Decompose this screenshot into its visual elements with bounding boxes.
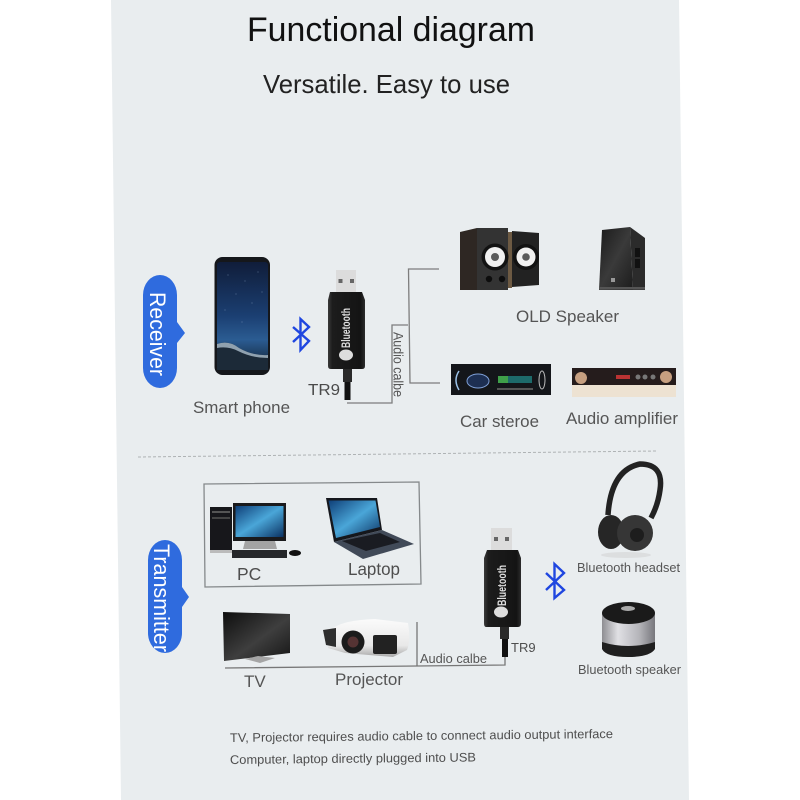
icon: PA speaker bbox=[599, 227, 645, 290]
label: audio cable vertical: Audio calbe bbox=[390, 332, 406, 397]
icon: bookshelf speakers bbox=[460, 228, 539, 290]
label: audio amplifier: Audio amplifier bbox=[566, 409, 678, 428]
connector: receiver audio cable bbox=[347, 269, 440, 403]
device: TR9 receiver dongle bbox=[328, 270, 365, 400]
badge: Receiver bbox=[143, 275, 185, 388]
connector: transmitter audio cable bbox=[225, 622, 505, 668]
note: line one: TV, Projector requires audio cable to connect audio output interface bbox=[230, 727, 613, 745]
device: TR9 transmitter dongle bbox=[484, 528, 521, 657]
title: Functional diagram bbox=[247, 11, 535, 49]
icon: car stereo bbox=[451, 364, 551, 395]
icon: bluetooth symbol receiver bbox=[293, 319, 309, 350]
icon: audio amplifier bbox=[572, 368, 676, 397]
icon: TV bbox=[223, 612, 290, 663]
label: bluetooth headset: Bluetooth headset bbox=[577, 561, 681, 575]
badge: Transmitter bbox=[148, 540, 189, 653]
label: audio cable horizontal: Audio calbe bbox=[420, 651, 487, 666]
label: bluetooth speaker: Bluetooth speaker bbox=[578, 663, 681, 677]
panel: PC and laptop box bbox=[204, 482, 421, 587]
label: smart phone: Smart phone bbox=[193, 399, 290, 417]
label: TR9 transmitter: TR9 bbox=[511, 640, 536, 655]
badge: Transmitter: Transmitter bbox=[149, 544, 174, 652]
label: TV: TV bbox=[244, 672, 266, 691]
panel: background sheet bbox=[111, 0, 689, 800]
label: Projector: Projector bbox=[335, 670, 403, 689]
badge: Receiver: Receiver bbox=[145, 292, 170, 376]
icon: smart phone bbox=[214, 257, 270, 375]
icon: bluetooth speaker bbox=[602, 602, 655, 657]
label: Laptop: Laptop bbox=[348, 559, 400, 579]
label: PC: PC bbox=[237, 564, 261, 584]
icon: headset bbox=[598, 464, 661, 558]
subtitle: Versatile. Easy to use bbox=[263, 69, 510, 99]
label: TR9 receiver: TR9 bbox=[308, 382, 340, 399]
device: TR9 transmitter dongle: Bluetooth bbox=[497, 565, 509, 606]
icon: laptop bbox=[326, 498, 414, 559]
icon: desktop PC bbox=[210, 503, 301, 558]
icon: projector bbox=[323, 619, 409, 657]
device: TR9 receiver dongle: Bluetooth bbox=[341, 308, 353, 348]
icon: bluetooth symbol transmitter bbox=[546, 564, 564, 598]
note: line two: Computer, laptop directly plugged into USB bbox=[230, 750, 476, 767]
label: car stereo: Car steroe bbox=[460, 413, 539, 431]
label: OLD speaker: OLD Speaker bbox=[516, 307, 619, 326]
